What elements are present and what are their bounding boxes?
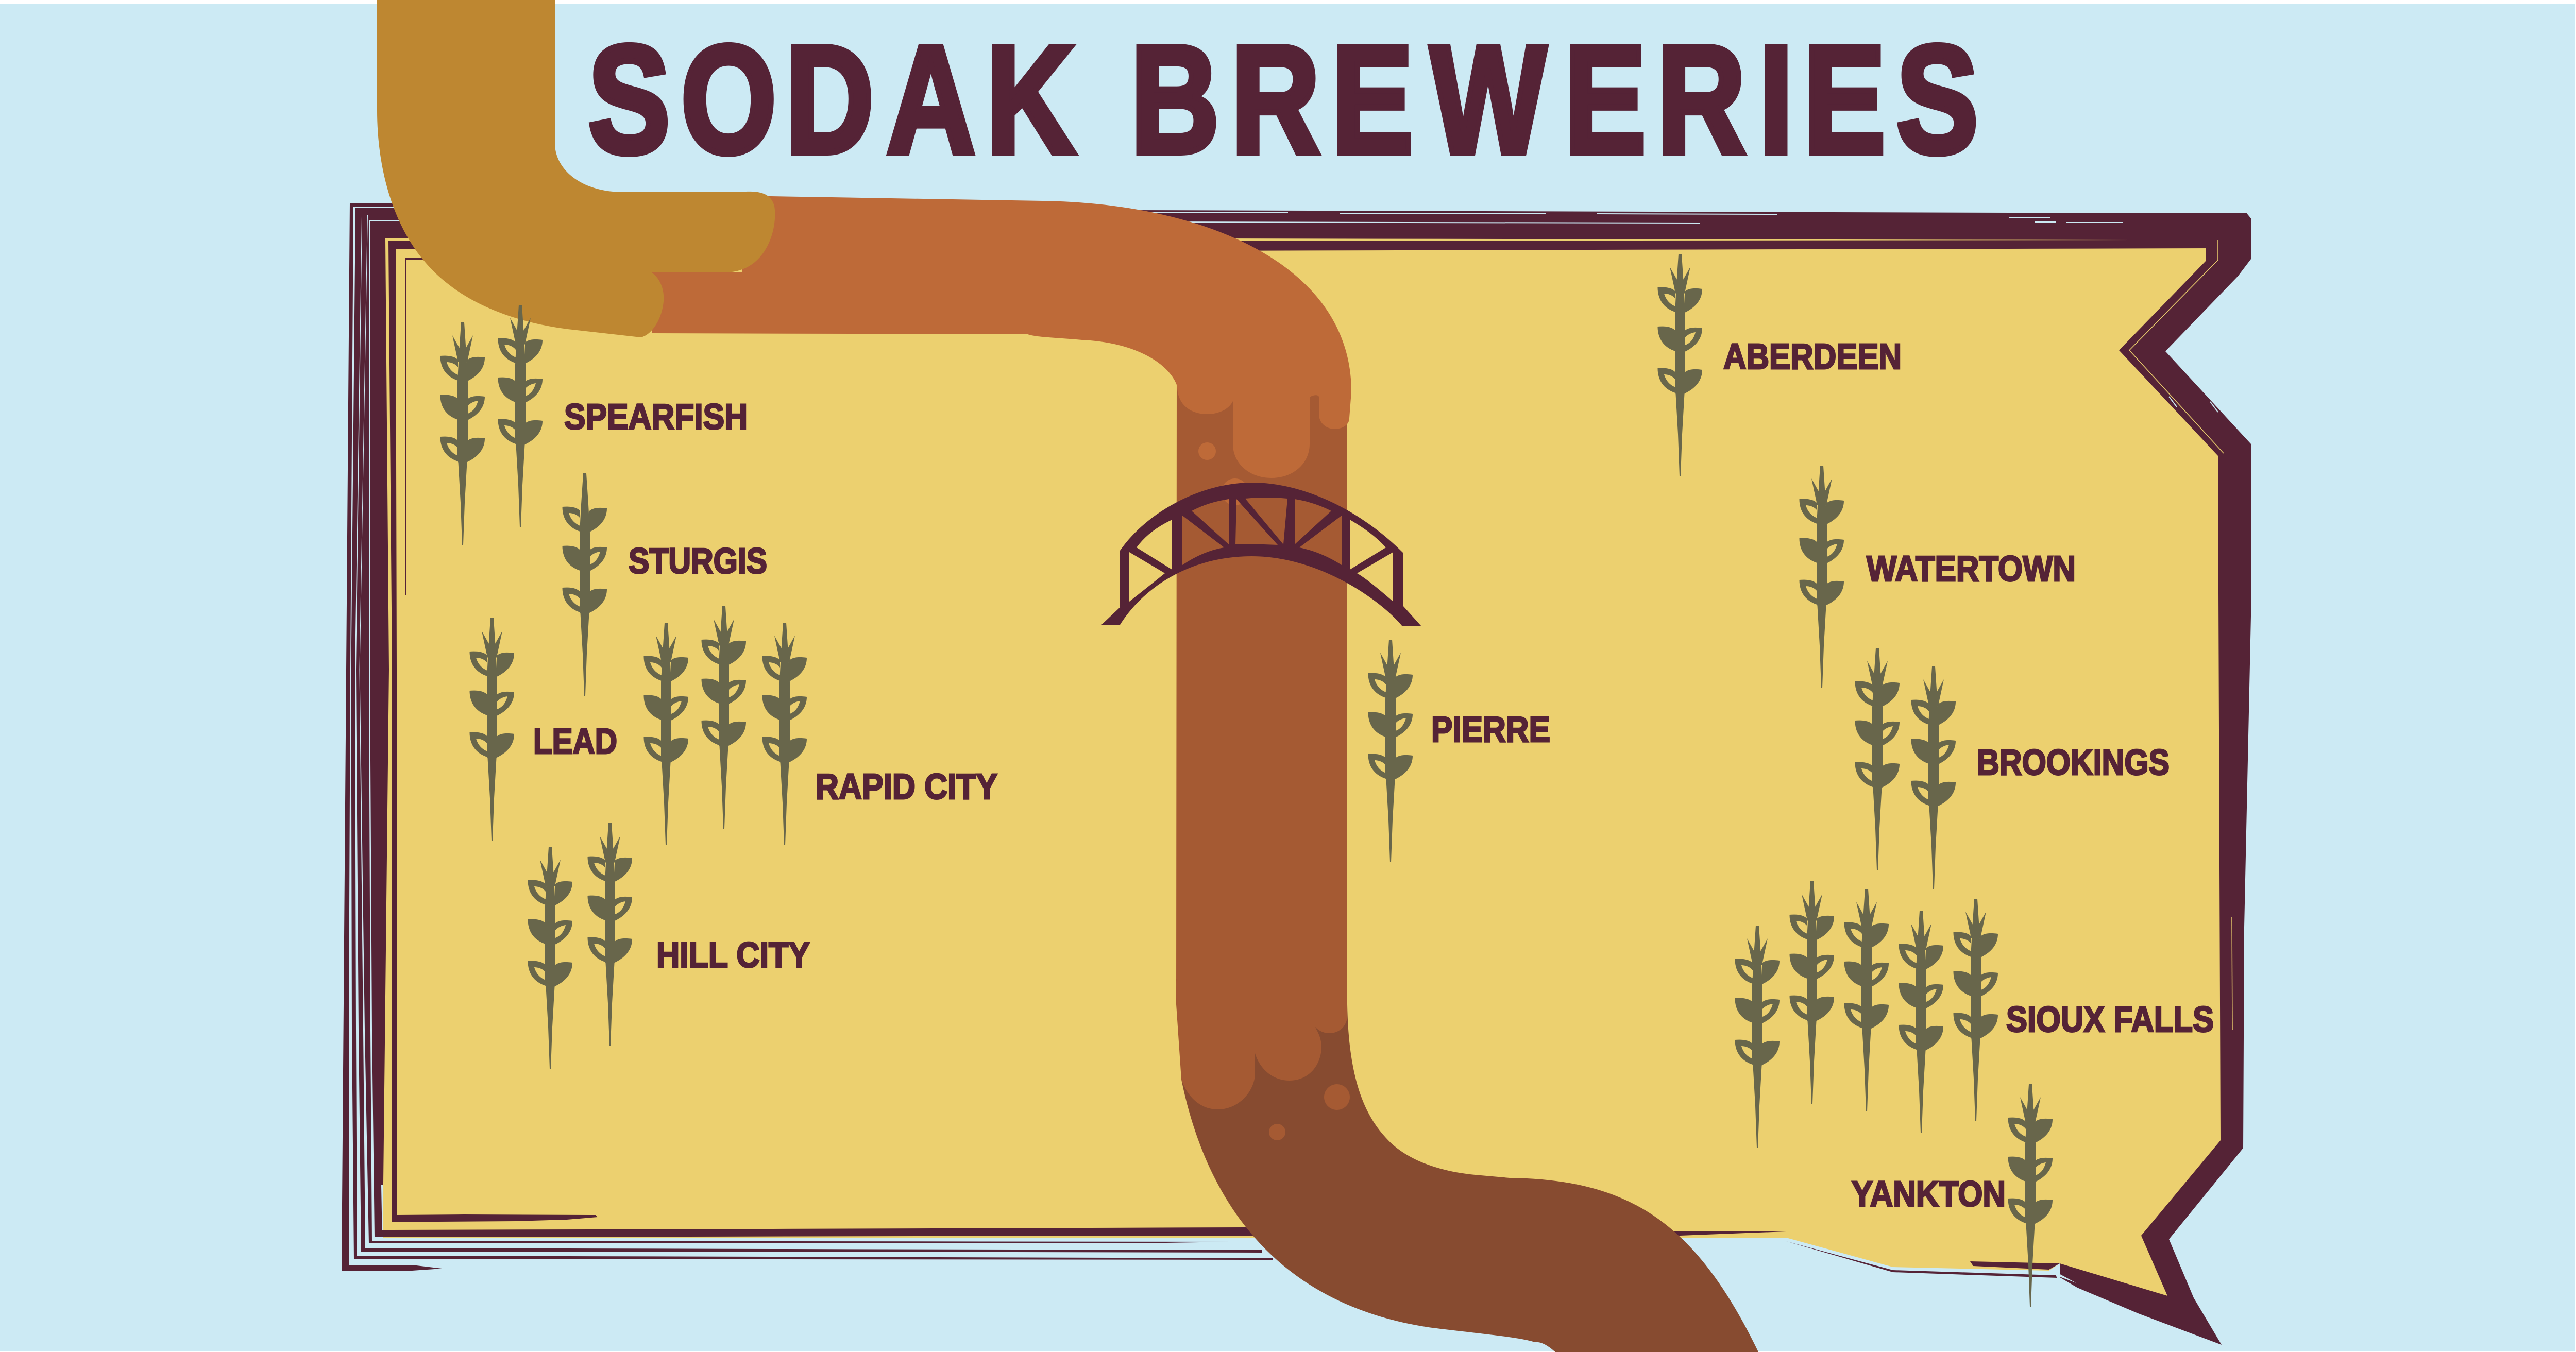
beer bubble [1198, 442, 1216, 460]
label: Hill City: HILL CITY [656, 935, 810, 975]
label: Watertown: WATERTOWN [1867, 549, 2076, 589]
decorative [349, 207, 407, 1265]
beer pipe: dark lower section [1176, 979, 1759, 1352]
label: Lead: LEAD [533, 721, 617, 761]
wheat: Pierre [1368, 640, 1413, 862]
wheat: Watertown [1799, 466, 1844, 688]
map bottom border [375, 1227, 1786, 1237]
beer pipe: gold top section [377, 0, 775, 337]
label: Brookings: BROOKINGS [1977, 742, 2170, 782]
icon: river bridge [1101, 483, 1421, 626]
map thin inner line [405, 258, 443, 595]
wheat: Spearfish [440, 305, 543, 545]
wheat: Hill City [528, 823, 632, 1069]
label: Aberdeen: ABERDEEN [1723, 336, 1902, 376]
beer bubble [1222, 478, 1248, 505]
map rough outer border [342, 203, 2251, 1345]
wheat: Aberdeen [1658, 254, 1702, 476]
decorative [1133, 212, 2218, 412]
decorative [2057, 1273, 2076, 1283]
wheat: Lead [470, 618, 514, 841]
beer pipe: brown vertical section [1176, 371, 1350, 1140]
wheat: Brookings [1855, 648, 1956, 889]
wheat: Yankton [2008, 1084, 2053, 1307]
title: SODAK BREWERIES [588, 14, 1978, 185]
wheat: Rapid City [644, 606, 807, 845]
map inner border line [388, 240, 2210, 1222]
decorative [1546, 240, 2232, 1233]
label: Sioux Falls: SIOUX FALLS [2006, 999, 2214, 1039]
label: Spearfish: SPEARFISH [564, 397, 748, 437]
label: Sturgis: STURGIS [629, 541, 767, 581]
map bottom lines [342, 1241, 1273, 1271]
map of South Dakota [342, 203, 2251, 1345]
wheat: Sioux Falls [1735, 881, 1998, 1148]
map south-east thin border [1786, 1241, 2060, 1278]
wheat: Sturgis [563, 473, 607, 696]
label: Pierre: PIERRE [1431, 709, 1550, 749]
map yellow land [383, 238, 2221, 1296]
beer bubble [1324, 1084, 1350, 1110]
beer pipe: orange bend [652, 196, 1351, 478]
label: Yankton: YANKTON [1852, 1174, 2006, 1214]
label: Rapid City: RAPID CITY [816, 766, 997, 807]
beer bubble [1269, 1124, 1285, 1140]
